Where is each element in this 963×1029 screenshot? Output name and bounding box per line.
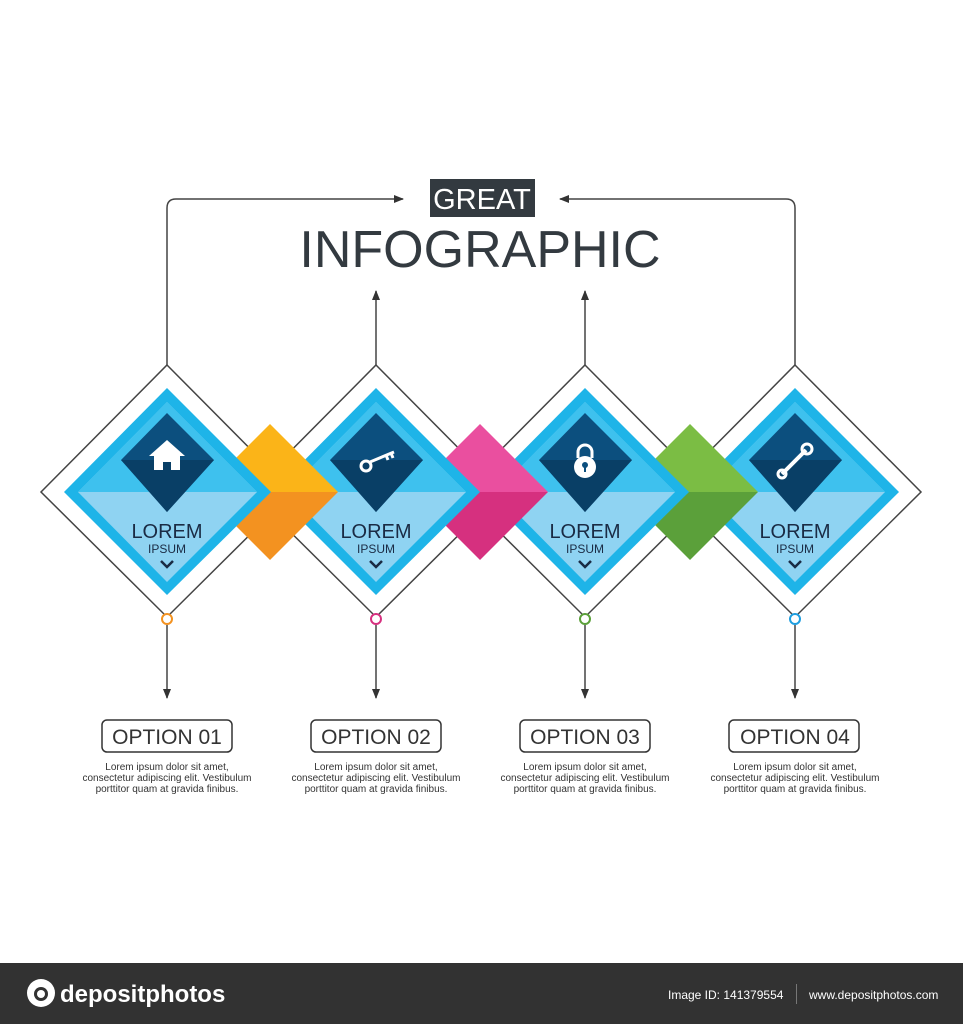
options text: Lorem ipsum dolor sit amet, xyxy=(314,762,438,773)
step 4 xyxy=(692,388,899,595)
step 1: IPSUM xyxy=(148,542,186,556)
options text: porttitor quam at gravida finibus. xyxy=(305,784,447,795)
options text: OPTION 02 xyxy=(321,726,431,749)
connector: orange xyxy=(202,424,338,560)
options text: Lorem ipsum dolor sit amet, xyxy=(733,762,857,773)
title xyxy=(299,179,661,279)
footer bar: www.depositphotos.com xyxy=(808,988,938,1002)
options text: consectetur adipiscing elit. Vestibulum xyxy=(501,773,669,784)
options text: consectetur adipiscing elit. Vestibulum xyxy=(292,773,460,784)
options text: porttitor quam at gravida finibus. xyxy=(96,784,238,795)
footer bar: Image ID: 141379554 xyxy=(668,988,784,1002)
options text: Lorem ipsum dolor sit amet, xyxy=(105,762,229,773)
title: GREAT xyxy=(433,184,531,216)
connector: green xyxy=(622,424,758,560)
step 4: IPSUM xyxy=(776,542,814,556)
options text: OPTION 03 xyxy=(530,726,640,749)
arrow: bottom connectors xyxy=(162,614,800,698)
options text xyxy=(83,720,879,795)
step 4: LOREM xyxy=(759,521,831,543)
step 2: IPSUM xyxy=(357,542,395,556)
step 1 xyxy=(64,388,271,595)
step 2: LOREM xyxy=(340,521,412,543)
connector: pink xyxy=(412,424,548,560)
step 1: LOREM xyxy=(131,521,203,543)
step 3: LOREM xyxy=(549,521,621,543)
options text: OPTION 04 xyxy=(740,726,850,749)
step 2 xyxy=(273,388,480,595)
footer bar xyxy=(0,963,963,1024)
options text: OPTION 01 xyxy=(112,726,222,749)
options text: porttitor quam at gravida finibus. xyxy=(514,784,656,795)
options text: consectetur adipiscing elit. Vestibulum xyxy=(711,773,879,784)
step 3 xyxy=(482,388,689,595)
footer bar: depositphotos xyxy=(60,981,225,1008)
step 3: IPSUM xyxy=(566,542,604,556)
options text: Lorem ipsum dolor sit amet, xyxy=(523,762,647,773)
arrow: top connectors xyxy=(167,199,795,365)
title: INFOGRAPHIC xyxy=(299,221,661,279)
options text: porttitor quam at gravida finibus. xyxy=(724,784,866,795)
outlines xyxy=(41,365,921,617)
options text: consectetur adipiscing elit. Vestibulum xyxy=(83,773,251,784)
